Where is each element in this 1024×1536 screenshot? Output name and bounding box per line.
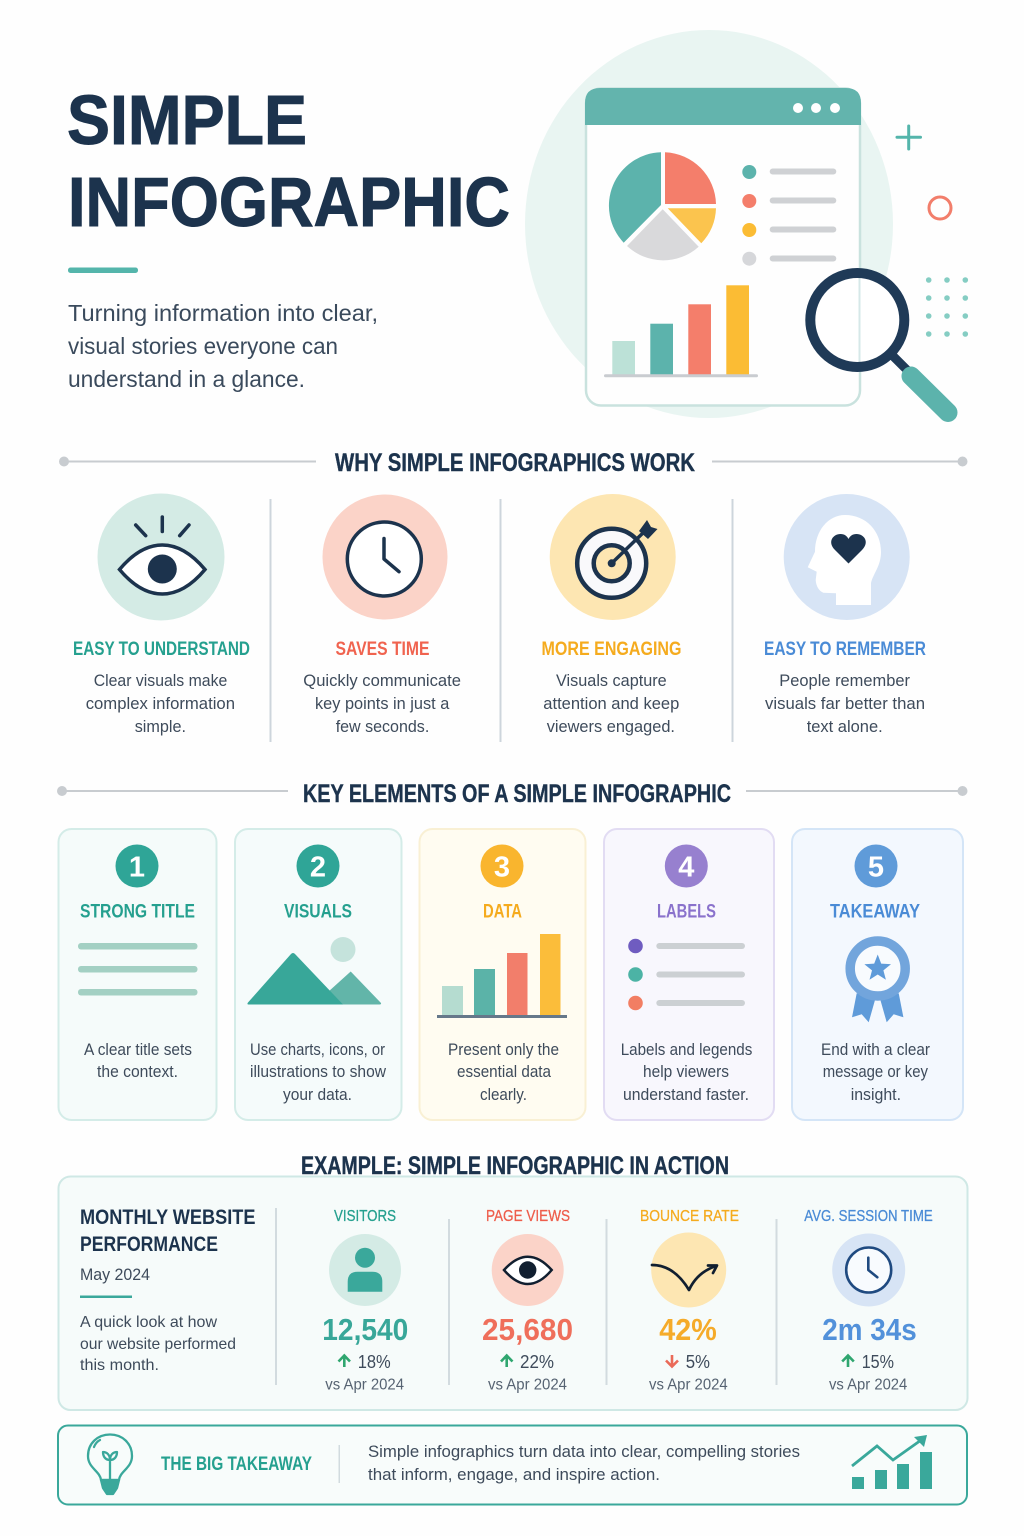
panel: more engaging [542, 494, 682, 736]
icon: clock [846, 1248, 891, 1292]
pie chart [609, 152, 716, 260]
decorative dots [926, 277, 968, 337]
card 4: labels: understand faster. [623, 1086, 749, 1104]
card 1: strong title [58, 829, 216, 1120]
arrow down [666, 1355, 678, 1366]
monthly website performance text block: A quick look at how [80, 1314, 217, 1331]
icon: mountains and sun [247, 937, 381, 1004]
panel: easy to understand [73, 494, 250, 736]
magnifier [810, 273, 948, 412]
icon: target [577, 520, 658, 598]
metric: bounce rate [640, 1208, 739, 1394]
icon: eye [120, 517, 205, 594]
legend [742, 165, 836, 266]
icon: legend list [628, 939, 745, 1010]
panel: saves time: few seconds. [336, 717, 429, 736]
panel: saves time: SAVES TIME [336, 639, 430, 660]
card 2: visuals: illustrations to show [250, 1063, 386, 1081]
number badge 1 [116, 844, 158, 888]
panel: more engaging: viewers engaged. [547, 717, 675, 736]
panel: the big takeaway [58, 1426, 967, 1504]
subtitle [68, 300, 378, 392]
card 4: labels: help viewers [643, 1063, 729, 1081]
takeaway message: Simple infographics turn data into clear, compelling stories [368, 1442, 800, 1461]
icon: head with heart [808, 515, 881, 605]
panel: saves time: key points in just a [315, 694, 450, 713]
panel: more engaging: MORE ENGAGING [542, 639, 682, 660]
metric: bounce rate: vs Apr 2024 [649, 1376, 728, 1394]
title: SIMPLE [67, 81, 307, 159]
icon: award ribbon [850, 941, 905, 1022]
number badge 2: 2 [310, 852, 326, 884]
number badge 5: 5 [868, 852, 884, 884]
metric: avg session time: 2m 34s [822, 1312, 917, 1347]
number badge 1: 1 [129, 852, 145, 884]
panel: easy to understand: EASY TO UNDERSTAND [73, 639, 250, 660]
metric: bounce rate: 42% [659, 1312, 717, 1347]
panel: easy to remember: People remember [779, 671, 910, 690]
metric: avg session time: vs Apr 2024 [829, 1376, 907, 1394]
number badge 3: 3 [494, 852, 510, 884]
card 1: strong title: the context. [97, 1063, 178, 1081]
card 2: visuals: your data. [283, 1086, 352, 1104]
icon: title lines [78, 943, 198, 996]
monthly website performance text block: this month. [80, 1357, 159, 1374]
card 2: visuals: Use charts, icons, or [250, 1041, 385, 1059]
panel: easy to remember: EASY TO REMEMBER [764, 639, 926, 660]
icon: bounce arrow [652, 1265, 717, 1290]
arrow up [842, 1356, 854, 1367]
number badge 4: 4 [678, 852, 694, 884]
icon: eye [504, 1257, 552, 1284]
card 3: data: clearly. [480, 1086, 527, 1104]
heading: key elements: KEY ELEMENTS OF A SIMPLE INFOGRAPHIC [303, 780, 731, 808]
title [67, 81, 510, 241]
icon: light bulb with sprout [88, 1434, 132, 1494]
metric: page views: vs Apr 2024 [488, 1376, 567, 1394]
arrow up [501, 1356, 512, 1367]
decorative plus [897, 126, 920, 149]
metric: page views: PAGE VIEWS [486, 1208, 570, 1225]
heading: example: EXAMPLE: SIMPLE INFOGRAPHIC IN ACTION [301, 1152, 729, 1180]
card 4: labels: LABELS [657, 902, 716, 922]
card 3: data: DATA [483, 902, 522, 922]
card 4: labels [604, 829, 774, 1120]
panel: example dashboard [58, 1176, 968, 1410]
number badge 3 [480, 844, 524, 888]
number badge 2 [296, 844, 340, 888]
panel: saves time [303, 494, 461, 736]
panel: saves time: Quickly communicate [303, 671, 461, 690]
card 5: takeaway: End with a clear [821, 1041, 930, 1059]
monthly website performance text block: May 2024 [80, 1266, 150, 1284]
title accent bar [68, 268, 138, 273]
metric: bounce rate: 5% [686, 1352, 710, 1372]
panel: easy to understand: Clear visuals make [94, 671, 227, 690]
hero illustration: dashboard with magnifier [525, 30, 968, 418]
card 1: strong title: A clear title sets [84, 1041, 192, 1059]
monthly website performance text block: PERFORMANCE [80, 1233, 218, 1256]
metric: visitors: 12,540 [322, 1312, 408, 1347]
title: INFOGRAPHIC [68, 163, 510, 241]
panel: easy to understand: simple. [135, 717, 186, 736]
icon: growth chart [852, 1435, 932, 1489]
metric: bounce rate: BOUNCE RATE [640, 1208, 739, 1225]
panel: easy to understand: complex information [86, 694, 235, 713]
takeaway message: that inform, engage, and inspire action. [368, 1465, 660, 1484]
card 2: visuals [235, 829, 402, 1120]
icon: user [348, 1248, 382, 1292]
bar chart [604, 285, 758, 377]
card 5: takeaway: insight. [851, 1086, 901, 1104]
heading: why simple infographics work: WHY SIMPLE INFOGRAPHICS WORK [335, 449, 695, 477]
card 3: data: Present only the [448, 1041, 559, 1059]
card 5: takeaway: TAKEAWAY [830, 902, 920, 922]
metric: page views [482, 1208, 573, 1394]
monthly website performance text block [80, 1206, 256, 1374]
subtitle: visual stories everyone can [68, 333, 338, 359]
card 1: strong title: STRONG TITLE [80, 902, 195, 922]
panel: easy to remember: text alone. [807, 717, 883, 736]
panel: easy to remember: visuals far better than [765, 694, 925, 713]
card 5: takeaway [792, 829, 963, 1120]
metric: visitors [322, 1208, 408, 1394]
panel: easy to remember [764, 494, 926, 736]
number badge 5 [854, 844, 898, 888]
card 2: visuals: VISUALS [284, 902, 352, 922]
panel: more engaging: attention and keep [543, 694, 679, 713]
metric: visitors: 18% [358, 1352, 391, 1372]
monthly website performance text block: our website performed [80, 1336, 236, 1353]
icon: bar chart [437, 934, 567, 1018]
metric: page views: 22% [520, 1352, 554, 1372]
icon: clock [347, 522, 421, 596]
metric: visitors: VISITORS [334, 1208, 396, 1225]
monthly website performance text block: MONTHLY WEBSITE [80, 1206, 256, 1229]
metric: visitors: vs Apr 2024 [325, 1376, 404, 1394]
card 3: data [420, 829, 586, 1120]
decorative ring [929, 197, 951, 219]
subtitle: Turning information into clear, [68, 300, 378, 326]
metric: page views: 25,680 [482, 1312, 573, 1347]
card 4: labels: Labels and legends [621, 1041, 752, 1059]
card 3: data: essential data [457, 1063, 552, 1081]
metric: avg session time: AVG. SESSION TIME [804, 1208, 933, 1225]
metric: avg session time: 15% [862, 1352, 894, 1372]
number badge 4 [665, 844, 708, 888]
panel: more engaging: Visuals capture [556, 671, 667, 690]
metric: avg session time [804, 1208, 933, 1394]
takeaway message [368, 1442, 800, 1484]
subtitle: understand in a glance. [68, 366, 305, 392]
card 5: takeaway: message or key [823, 1063, 929, 1081]
browser window [585, 88, 861, 406]
panel: the big takeaway: THE BIG TAKEAWAY [161, 1454, 312, 1475]
arrow up [338, 1356, 350, 1367]
